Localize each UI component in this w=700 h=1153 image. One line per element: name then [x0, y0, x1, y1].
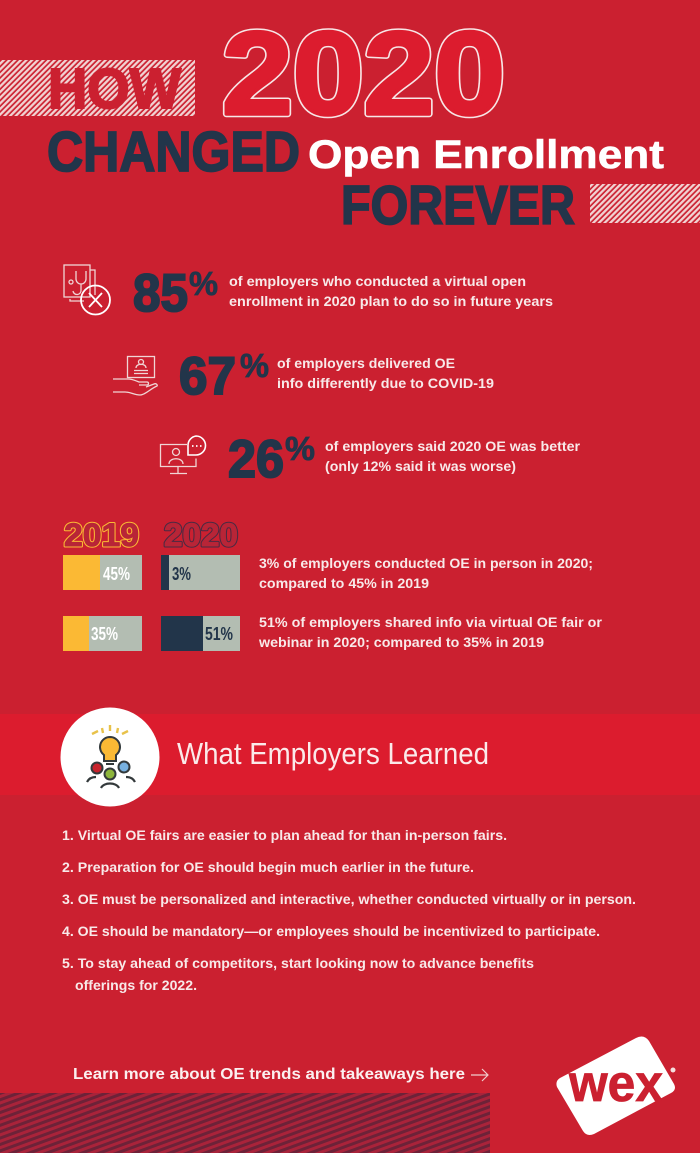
text: in person comparison: 3% of employers conducted OE in person in 2020; — [259, 556, 593, 571]
stat: 26% — [160, 430, 581, 489]
stat: 26%: % — [285, 430, 315, 467]
year label: 2020: 2020 — [164, 517, 238, 553]
stat: 67% — [113, 347, 494, 406]
year label: 2019: 2019 — [64, 517, 139, 553]
title: How 2020 Changed Open Enrollment Forever: HOW — [48, 57, 181, 121]
icon: stethoscope document with X — [64, 265, 110, 314]
list: lessons learned: 5. To stay ahead of competitors, start looking now to advance benefits — [62, 956, 534, 971]
decorative stripe block — [0, 1093, 490, 1153]
title: How 2020 Changed Open Enrollment Forever: Open Enrollment — [308, 133, 664, 177]
year label: 2019: 2019 — [64, 517, 139, 553]
stat: 85%: 85 — [133, 264, 188, 323]
list: lessons learned: 3. OE must be personalized and interactive, whether conducted virtually or in person. — [62, 892, 636, 907]
bar: in person 2019: 45% — [103, 564, 130, 584]
stat: 67%: info differently due to COVID-19 — [277, 376, 494, 391]
title: How 2020 Changed Open Enrollment Forever: FOREVER — [341, 174, 575, 236]
list: lessons learned: offerings for 2022. — [75, 978, 197, 993]
title: How 2020 Changed Open Enrollment Forever — [0, 8, 700, 236]
stat: 85%: enrollment in 2020 plan to do so in future years — [229, 294, 553, 309]
icon: hand holding profile screen — [113, 356, 157, 395]
stat: 85%: of employers who conducted a virtual open — [229, 274, 526, 289]
panel: What Employers Learned band — [0, 708, 700, 806]
list: lessons learned: 2. Preparation for OE should begin much earlier in the future. — [62, 860, 474, 875]
bar: virtual 2019: 35% — [91, 624, 118, 644]
logo: WEX: wex — [568, 1055, 663, 1113]
stat: 67%: of employers delivered OE — [277, 356, 455, 371]
title: How 2020 Changed Open Enrollment Forever: 2020 — [222, 8, 505, 140]
stat: 85% — [64, 264, 553, 323]
arrow — [471, 1069, 488, 1081]
bar: in person 2020 — [161, 555, 240, 590]
bar: in person 2019 — [63, 555, 142, 590]
icon: light bulb and team — [60, 708, 160, 806]
stat: 67%: % — [240, 347, 269, 384]
heading: What Employers Learned — [177, 736, 489, 771]
logo: WEX — [556, 1037, 676, 1135]
list: lessons learned — [62, 828, 636, 993]
text: in person comparison: compared to 45% in 2019 — [259, 576, 429, 591]
text: in person comparison — [259, 556, 593, 591]
year label: 2020: 2020 — [164, 517, 238, 553]
stat: 67%: 67 — [179, 347, 236, 406]
stat: 26%: 26 — [228, 430, 284, 489]
title: How 2020 Changed Open Enrollment Forever: CHANGED — [47, 120, 300, 184]
bar: virtual 2020: 51% — [205, 624, 233, 644]
title: How 2020 Changed Open Enrollment Forever: 2020 — [222, 8, 505, 140]
icon: monitor with chat bubble — [160, 436, 206, 474]
stat: 26%: (only 12% said it was worse) — [325, 459, 516, 474]
stat: 85%: % — [189, 265, 218, 302]
list: lessons learned: 1. Virtual OE fairs are easier to plan ahead for than in-person fairs. — [62, 828, 507, 843]
text: virtual comparison: 51% of employers shared info via virtual OE fair or — [259, 615, 603, 630]
bar: virtual 2020 — [161, 616, 240, 651]
text: virtual comparison — [258, 615, 603, 650]
list: lessons learned: 4. OE should be mandatory—or employees should be incentivized to participate. — [62, 924, 600, 939]
call to action: Learn more about OE trends and takeaways here — [73, 1066, 465, 1083]
stat: 26%: of employers said 2020 OE was better — [325, 439, 581, 454]
text: virtual comparison: webinar in 2020; compared to 35% in 2019 — [258, 635, 544, 650]
bar: virtual 2019 — [63, 616, 142, 651]
bar: in person 2020: 3% — [172, 564, 191, 584]
